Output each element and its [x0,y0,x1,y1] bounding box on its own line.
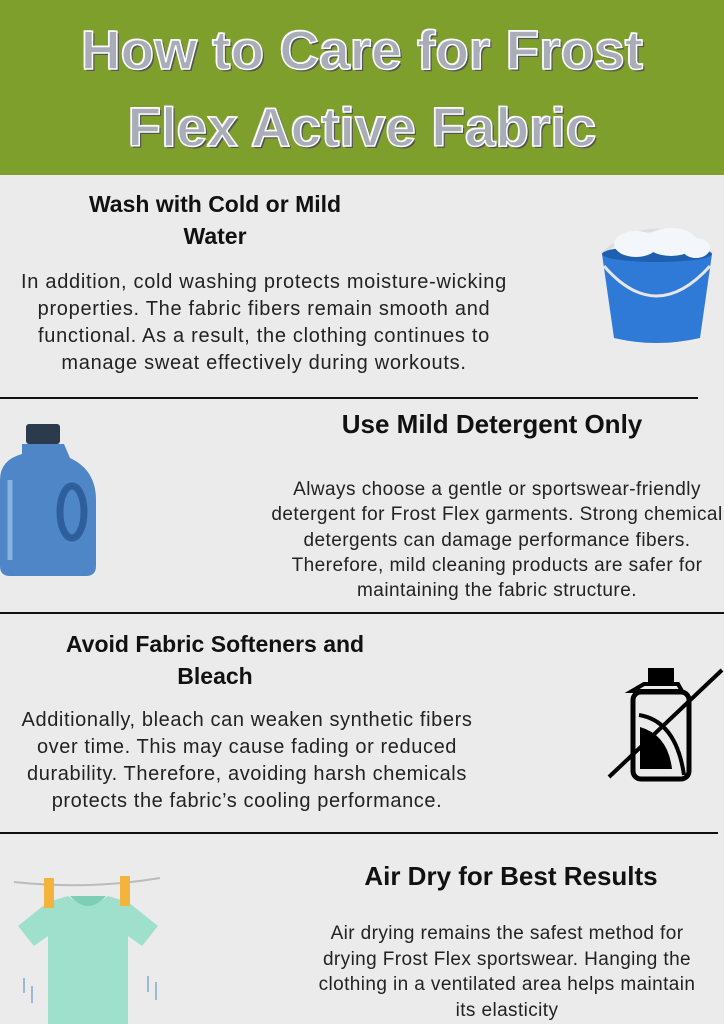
section 2 text [271,479,723,601]
title [81,19,644,158]
section 3 heading: Avoid Fabric Softeners and [66,631,364,657]
section 3 text: durability. Therefore, avoiding harsh chemicals [27,763,467,785]
section 2 heading: Use Mild Detergent Only [342,409,642,439]
section 1 text [21,271,507,374]
section 4 text: clothing in a ventilated area helps maintain [319,974,695,995]
section 2 text: maintaining the fabric structure. [357,580,637,601]
section 2 text: Therefore, mild cleaning products are safer for [292,555,702,576]
section 1 text: functional. As a result, the clothing continues to [38,325,490,347]
section 4 text [319,923,695,1021]
section 4 text: drying Frost Flex sportswear. Hanging the [323,949,691,970]
section 2 text: detergents can damage performance fibers. [303,530,691,551]
section 3 text: protects the fabric’s cooling performance. [52,790,442,812]
header banner [0,0,724,175]
section 3 text: over time. This may cause fading or reduced [37,736,457,758]
section 4 text: Air drying remains the safest method for [331,923,683,944]
section 3 text: Additionally, bleach can weaken synthetic fibers [22,709,472,731]
section 3 heading [66,631,364,689]
title: Flex Active Fabric [128,96,596,158]
icon: bucket [601,228,712,343]
section 1 heading: Water [183,223,247,249]
section 2 text: Always choose a gentle or sportswear-friendly [293,479,701,500]
section 1 text: manage sweat effectively during workouts. [61,352,467,374]
section 3 text [22,709,472,812]
section 4 heading: Air Dry for Best Results [364,861,658,891]
icon: detergent bottle [0,424,96,576]
title: How to Care for Frost [81,19,643,81]
icon: no bleach [608,668,724,782]
section 1 text: properties. The fabric fibers remain smooth and [38,298,490,320]
section 3 heading: Bleach [177,663,253,689]
section 2 text: detergent for Frost Flex garments. Strong chemical [271,504,723,525]
section 1 text: In addition, cold washing protects moisture-wicking [21,271,507,293]
section 1 heading [89,191,341,249]
section 4 text: its elasticity [456,1000,558,1021]
section 1 heading: Wash with Cold or Mild [89,191,341,217]
icon: t-shirt on line [14,876,160,1024]
